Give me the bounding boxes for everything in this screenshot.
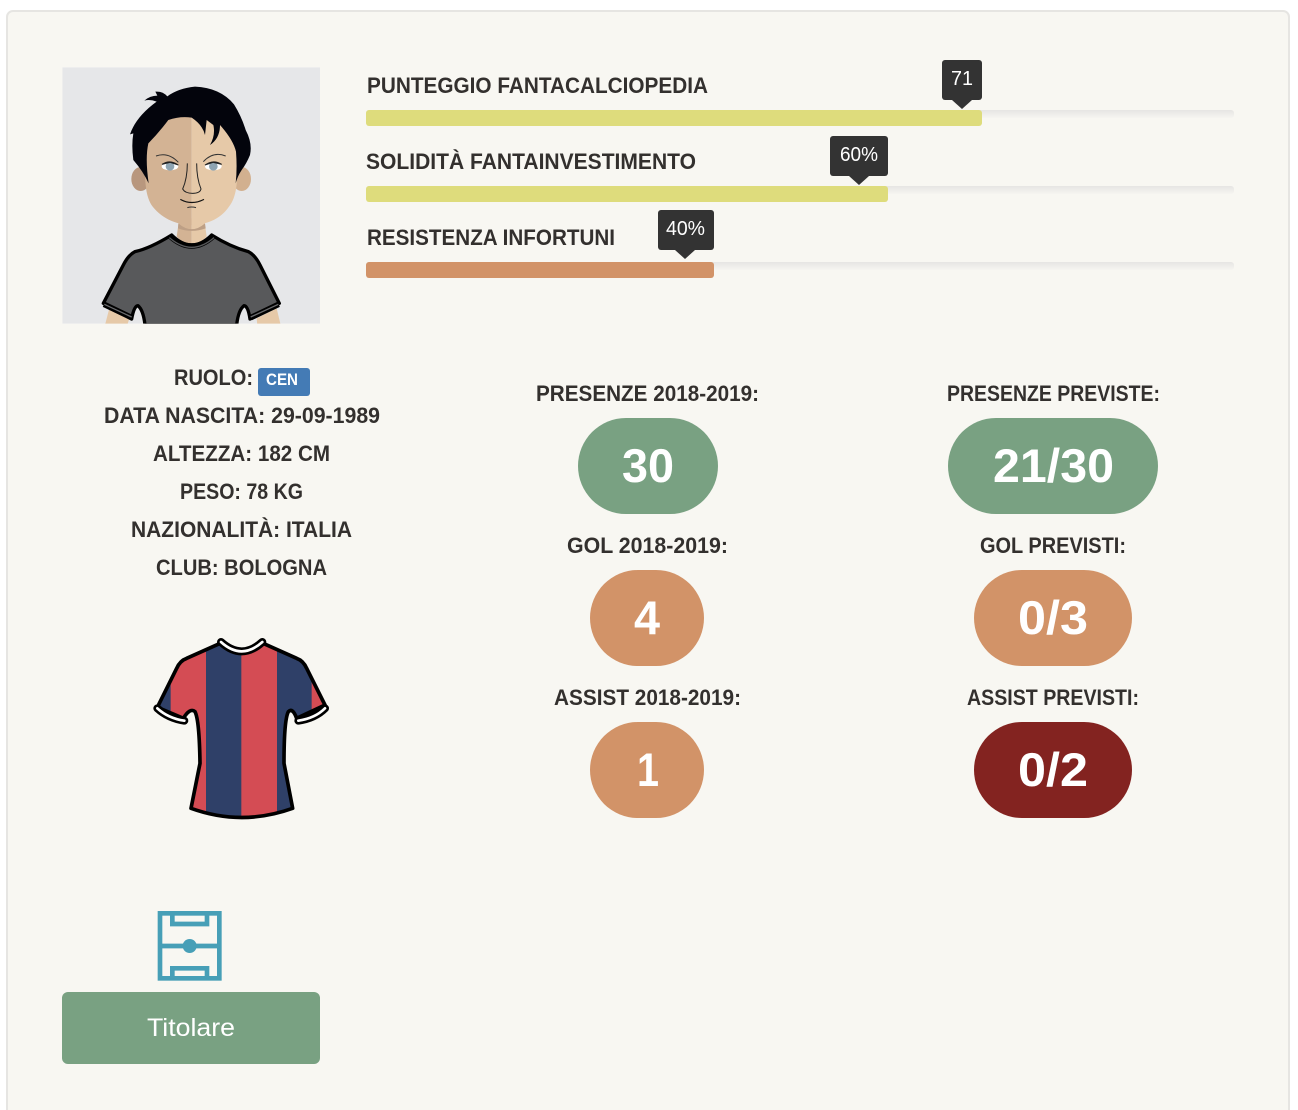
stat: presenze previste: 21/30 [993,439,1114,492]
icon: team jersey [153,637,330,827]
stat: presenze previste: PRESENZE PREVISTE: [947,381,1160,406]
player details: NAZIONALITÀ: ITALIA [131,517,352,542]
player details: PESO: 78 KG [180,479,303,504]
stat: presenze 2018-2019: 30 [622,439,674,492]
player avatar [62,67,320,325]
status button: titolare [62,992,320,1064]
stat: assist 2018-2019 [554,685,741,818]
stat: gol 2018-2019 [567,533,728,666]
stat: presenze previste [947,381,1160,514]
status button: titolare: Titolare [147,1014,235,1042]
score bar: solidità fantainvestimento: SOLIDITÀ FANTAINVESTIMENTO [366,149,696,174]
score bar: solidità fantainvestimento: 60% [840,144,878,166]
player details: ALTEZZA: 182 CM [153,441,330,466]
score bar: punteggio fantacalciopedia: 71 [951,68,973,90]
stat: gol 2018-2019: GOL 2018-2019: [567,533,728,558]
player details: RUOLO: [174,365,253,390]
player details: DATA NASCITA: 29-09-1989 [104,403,380,428]
stat: presenze 2018-2019: PRESENZE 2018-2019: [536,381,759,406]
score bar: solidità fantainvestimento [366,136,1234,202]
stat: assist previsti: ASSIST PREVISTI: [967,685,1139,710]
score bar: resistenza infortuni: 40% [666,218,705,240]
player details: CEN [266,370,298,389]
stat: assist previsti: 0/2 [1018,743,1088,796]
stat: assist 2018-2019: 1 [637,743,659,796]
stat: assist previsti [967,685,1139,818]
score bar: punteggio fantacalciopedia [366,60,1234,126]
score bar: punteggio fantacalciopedia: PUNTEGGIO FANTACALCIOPEDIA [367,73,708,98]
score bar: resistenza infortuni: RESISTENZA INFORTUNI [367,225,615,250]
stat: assist 2018-2019: ASSIST 2018-2019: [554,685,741,710]
stat: presenze 2018-2019 [536,381,759,514]
stat: gol previsti: 0/3 [1018,591,1088,644]
player details: CLUB: BOLOGNA [156,555,327,580]
player details [104,365,380,580]
stat: gol 2018-2019: 4 [634,591,660,644]
stat: gol previsti: GOL PREVISTI: [980,533,1126,558]
icon: football pitch [160,913,219,978]
score bar: resistenza infortuni [366,210,1234,278]
stat: gol previsti [974,533,1132,666]
